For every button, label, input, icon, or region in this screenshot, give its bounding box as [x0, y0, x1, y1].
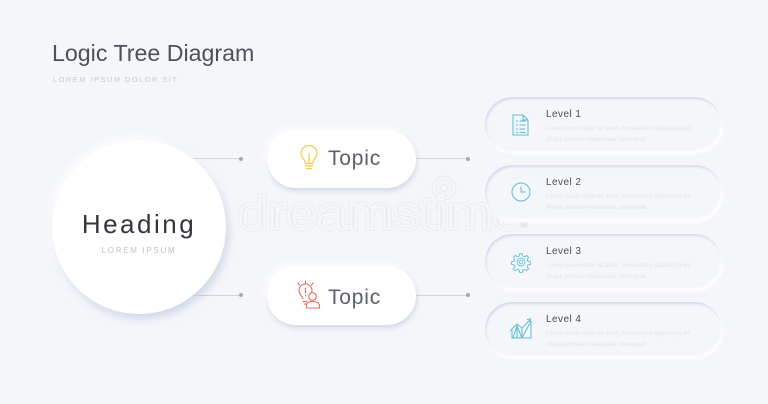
topic label: Topic	[328, 147, 381, 170]
level description	[546, 126, 690, 143]
heading text: Heading	[82, 209, 196, 239]
icon: light bulb	[300, 145, 318, 170]
level description: Lorem ipsum dolor sit amet, consectetur adipiscing elit	[546, 331, 690, 337]
connector: heading to top topic	[192, 157, 243, 161]
heading subtitle: LOREM IPSUM	[102, 246, 176, 255]
panel: level 3	[485, 234, 722, 289]
connector: bottom topic to levels	[416, 293, 470, 297]
watermark: dreamstime	[238, 187, 523, 239]
icon: chart	[510, 318, 532, 338]
level description	[546, 330, 690, 348]
icon: idea person	[298, 280, 320, 308]
level label: Level 3	[546, 246, 581, 257]
level label: Level 1	[546, 109, 581, 120]
panel: heading circle	[52, 140, 226, 314]
level description: Aliqua pulvinar malesuada consequat.	[546, 137, 647, 143]
level description: Aliqua pulvinar malesuada consequat.	[546, 342, 647, 348]
level description: Lorem ipsum dolor sit amet, consectetur adipiscing elit	[546, 263, 690, 269]
level description: Aliqua pulvinar malesuada consequat.	[546, 274, 647, 280]
panel: level 1	[485, 97, 722, 152]
panel: topic 2	[267, 266, 416, 325]
level description: Lorem ipsum dolor sit amet, consectetur adipiscing elit	[546, 194, 690, 200]
watermark: dreamstime	[238, 187, 523, 239]
topic label: Topic	[328, 286, 381, 309]
level description: Lorem ipsum dolor sit amet, consectetur adipiscing elit	[546, 126, 690, 132]
icon: gear	[511, 253, 531, 273]
panel: topic 1	[267, 130, 416, 188]
watermark	[238, 176, 528, 239]
panel: level 4	[485, 302, 722, 357]
icon: clock	[512, 182, 530, 202]
level label: Level 2	[546, 177, 581, 188]
icon: document	[512, 114, 528, 136]
connector: top topic to levels	[416, 157, 470, 161]
title: Logic Tree Diagram	[52, 40, 254, 66]
level label: Level 4	[546, 314, 581, 325]
subtitle: LOREM IPSUM DOLOR SIT	[53, 75, 178, 84]
level description	[546, 262, 690, 280]
level description	[546, 194, 690, 211]
connector: heading to bottom topic	[192, 293, 243, 297]
panel: level 2	[485, 165, 722, 220]
level description: Aliqua pulvinar malesuada consequat.	[546, 205, 647, 211]
